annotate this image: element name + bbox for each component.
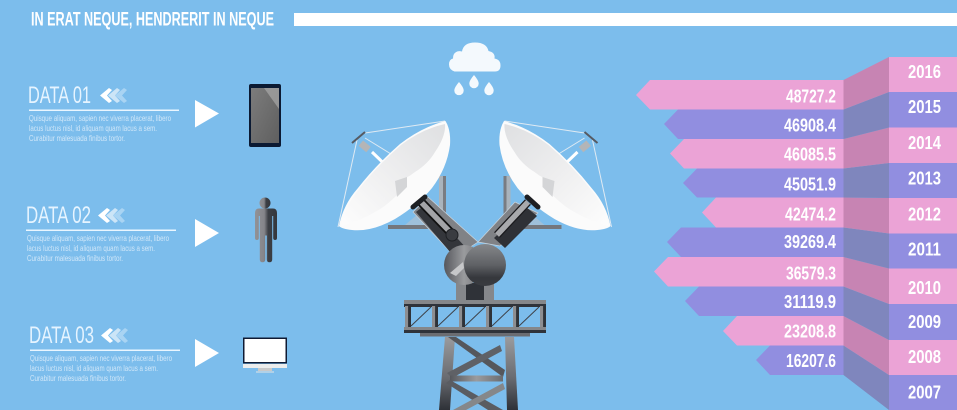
icon: computer monitor — [243, 338, 287, 372]
series 2008: 2008 — [908, 347, 941, 367]
divider line — [30, 350, 180, 351]
series 2009: 2009 — [908, 312, 941, 332]
series 2015: 2015 — [908, 97, 941, 117]
icon: chevrons — [98, 208, 125, 223]
series 2012: 42474.2 — [785, 204, 836, 224]
arm: right — [478, 197, 538, 248]
text block: Curabitur malesuada finibus tortor. — [30, 373, 126, 383]
arrow — [195, 339, 219, 367]
text block: lacus luctus nisl, id aliquam quam lacus a sem. — [29, 123, 157, 133]
tower neck — [456, 283, 494, 300]
divider line — [29, 110, 179, 111]
text block: Quisque aliquam, sapien nec viverra placerat, libero — [29, 113, 171, 123]
series 2016: 48727.2 — [786, 86, 836, 106]
heading: data 03: DATA 03 — [29, 322, 94, 349]
arm: left — [413, 197, 478, 259]
series 2015 — [664, 92, 957, 139]
series 2012: 2012 — [908, 204, 941, 224]
tower — [404, 197, 546, 410]
text block — [29, 113, 171, 143]
series 2007: 16207.6 — [786, 351, 836, 371]
panel: data 03 — [29, 322, 287, 383]
receiver stem — [395, 177, 407, 197]
series 2011: 39269.4 — [784, 232, 836, 252]
arrow — [195, 219, 219, 247]
series 2008: 23208.8 — [784, 322, 836, 342]
series 2014: 2014 — [908, 133, 941, 153]
panel: data 01 — [28, 82, 281, 147]
panel: data 02 — [26, 198, 277, 263]
hub — [444, 244, 506, 286]
heading: data 02: DATA 02 — [26, 202, 91, 229]
mount frame — [388, 176, 446, 229]
mount frame — [504, 176, 562, 229]
series 2015: 46908.4 — [784, 116, 836, 136]
divider line — [26, 230, 176, 231]
text block — [30, 353, 172, 383]
text block: lacus luctus nisl, id aliquam quam lacus a sem. — [30, 363, 158, 373]
series 2011: 2011 — [908, 240, 941, 260]
series 2013 — [683, 163, 957, 198]
text block: Curabitur malesuada finibus tortor. — [27, 253, 123, 263]
icon: smartphone — [249, 84, 281, 147]
tower legs — [439, 337, 518, 410]
text block: Quisque aliquam, sapien nec viverra placerat, libero — [27, 233, 169, 243]
truss platform — [404, 300, 546, 336]
series 2016: 2016 — [908, 62, 941, 82]
text block: Quisque aliquam, sapien nec viverra placerat, libero — [30, 353, 172, 363]
series 2010: 36579.3 — [786, 264, 836, 284]
dish interior — [341, 124, 445, 226]
feed lines — [504, 121, 612, 227]
text block: Curabitur malesuada finibus tortor. — [29, 133, 125, 143]
satellite dish: right — [499, 121, 612, 230]
feed lines — [338, 121, 445, 227]
series 2014: 46085.5 — [784, 144, 836, 164]
series 2008 — [723, 316, 957, 375]
series 2010: 2010 — [908, 278, 941, 298]
series 2013: 45051.9 — [784, 174, 836, 194]
dish bowl — [499, 121, 610, 230]
arrow — [195, 100, 219, 128]
series 2016 — [636, 57, 957, 110]
series 2011 — [667, 228, 957, 268]
series 2007: 2007 — [908, 382, 941, 402]
icon: chevrons — [100, 88, 127, 103]
satellite dish: left — [338, 121, 450, 230]
receiver stem — [542, 177, 554, 197]
series 2009: 31119.9 — [784, 292, 836, 312]
series 2010 — [654, 257, 957, 304]
series 2007 — [756, 346, 957, 410]
title bar — [294, 13, 957, 26]
dish bowl — [339, 121, 450, 230]
icon: chevrons — [101, 328, 128, 343]
text block — [27, 233, 169, 263]
series 2012 — [702, 198, 957, 234]
heading: data 01: DATA 01 — [28, 82, 91, 109]
icon: person — [255, 198, 277, 262]
series 2009 — [685, 286, 957, 340]
chart: value bars by year — [636, 57, 957, 410]
series 2014 — [670, 128, 957, 168]
icon: rain cloud — [449, 42, 500, 95]
series 2013: 2013 — [908, 168, 941, 188]
dish interior — [504, 124, 608, 226]
text block: lacus luctus nisl, id aliquam quam lacus a sem. — [27, 243, 155, 253]
title: IN ERAT NEQUE, HENDRERIT IN NEQUE — [31, 10, 274, 30]
